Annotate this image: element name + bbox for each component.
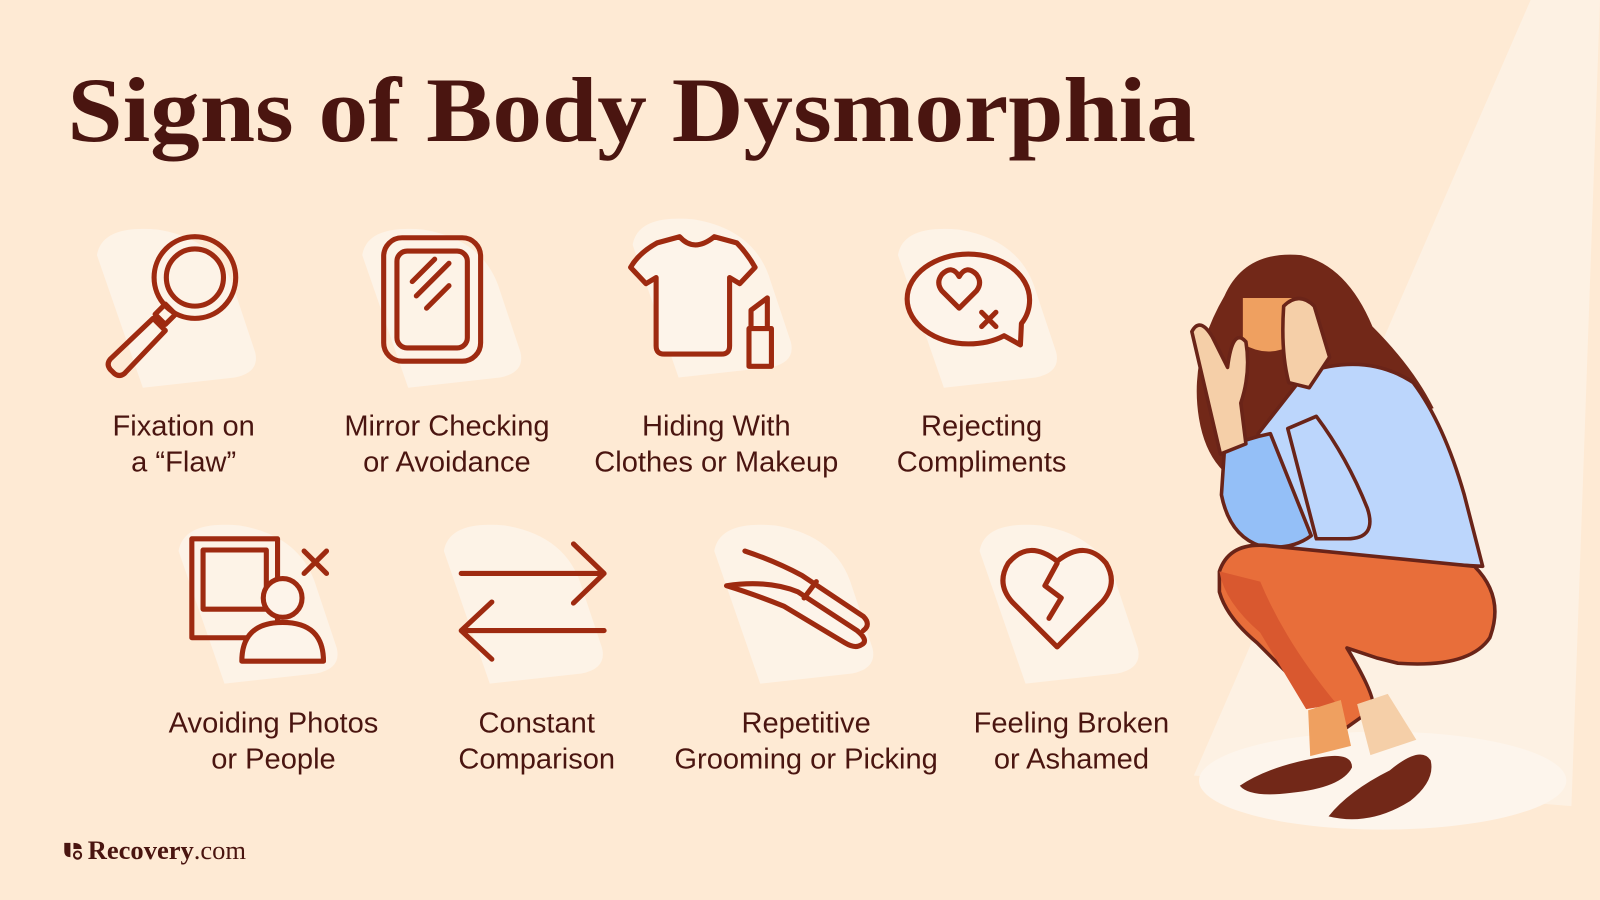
labels: Avoiding Photos — [169, 708, 378, 740]
labels: Feeling Broken — [974, 708, 1169, 740]
icon: tweezers — [714, 525, 873, 684]
labels: a “Flaw” — [131, 446, 236, 478]
icon: t-shirt and lipstick — [631, 219, 792, 378]
labels: Comparison — [458, 743, 615, 775]
icon: speech bubble heart — [898, 229, 1057, 388]
labels: Hiding With — [642, 411, 791, 443]
labels: Constant — [479, 708, 595, 740]
labels: or Avoidance — [363, 446, 531, 478]
labels — [113, 411, 1169, 775]
labels: or Ashamed — [994, 743, 1149, 775]
labels: Rejecting — [921, 411, 1042, 443]
figure: crouching woman — [1192, 255, 1495, 819]
labels: or People — [211, 743, 336, 775]
labels: Fixation on — [113, 411, 255, 443]
light beam — [1194, 0, 1600, 830]
icon: broken heart — [980, 525, 1139, 684]
icon: magnifier — [97, 229, 256, 388]
logo: Recovery.com — [88, 835, 246, 865]
title: Signs of Body Dysmorphia — [67, 59, 1196, 161]
labels: Clothes or Makeup — [594, 446, 838, 478]
labels: Grooming or Picking — [674, 743, 938, 775]
icon: comparison arrows — [444, 525, 604, 684]
labels: Repetitive — [741, 708, 871, 740]
icon: mirror — [362, 229, 521, 388]
icon: avoiding photos — [179, 525, 338, 684]
labels: Mirror Checking — [344, 411, 550, 443]
labels: Compliments — [897, 446, 1066, 478]
